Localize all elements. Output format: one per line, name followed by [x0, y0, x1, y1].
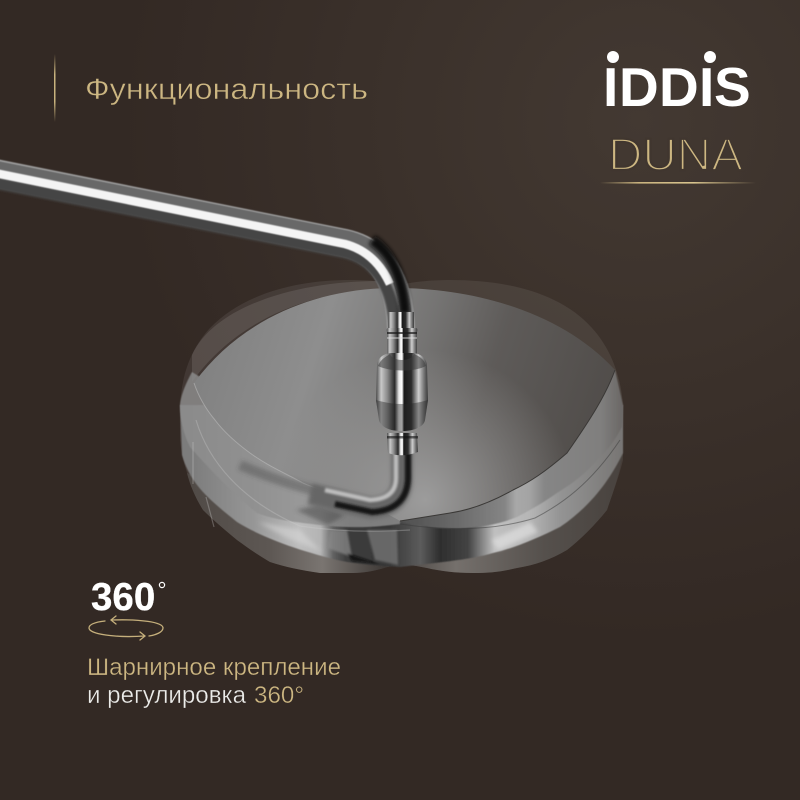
top face light	[194, 288, 615, 521]
vertical accent line	[54, 54, 56, 122]
ghost disc left	[192, 281, 400, 382]
smoky reflection left	[296, 505, 345, 525]
sleeve top shoulder	[378, 354, 426, 370]
glass edge line	[196, 420, 410, 531]
upper collar	[387, 328, 417, 355]
product name: DUNA: DUNA	[608, 129, 743, 180]
left edge streak	[193, 442, 214, 527]
ghost seam line	[400, 440, 620, 529]
lower skirt	[187, 453, 623, 573]
right edge shadow line	[400, 370, 615, 521]
upper rim band left	[180, 372, 400, 527]
main sleeve	[376, 353, 428, 431]
upper tube	[0, 165, 414, 330]
logo: IDDIS: IDDIS	[603, 56, 751, 118]
reflection on bottom rim: highlights	[258, 522, 538, 552]
title: Функциональность	[85, 73, 368, 106]
top face of disc	[194, 288, 615, 521]
icon: rotation arrows	[89, 616, 163, 640]
360 degree label: 360	[91, 576, 155, 619]
lower collar	[387, 433, 418, 455]
caption	[87, 654, 341, 709]
gold underline	[600, 182, 756, 184]
lens highlight	[194, 383, 357, 497]
product: shower head disc with rotation ghosts	[180, 280, 623, 573]
lower tube reflection	[240, 450, 408, 512]
lower rim band	[180, 405, 623, 567]
swivel joint	[376, 328, 428, 455]
upper rim band right	[400, 370, 623, 528]
ghost silhouette	[180, 280, 623, 573]
caption: 360°	[254, 682, 304, 709]
caption: и регулировка	[87, 682, 247, 709]
reflection on bottom rim: wedges	[327, 530, 398, 566]
caption: Шарнирное крепление	[87, 654, 341, 681]
sleeve lower tone	[376, 400, 428, 431]
